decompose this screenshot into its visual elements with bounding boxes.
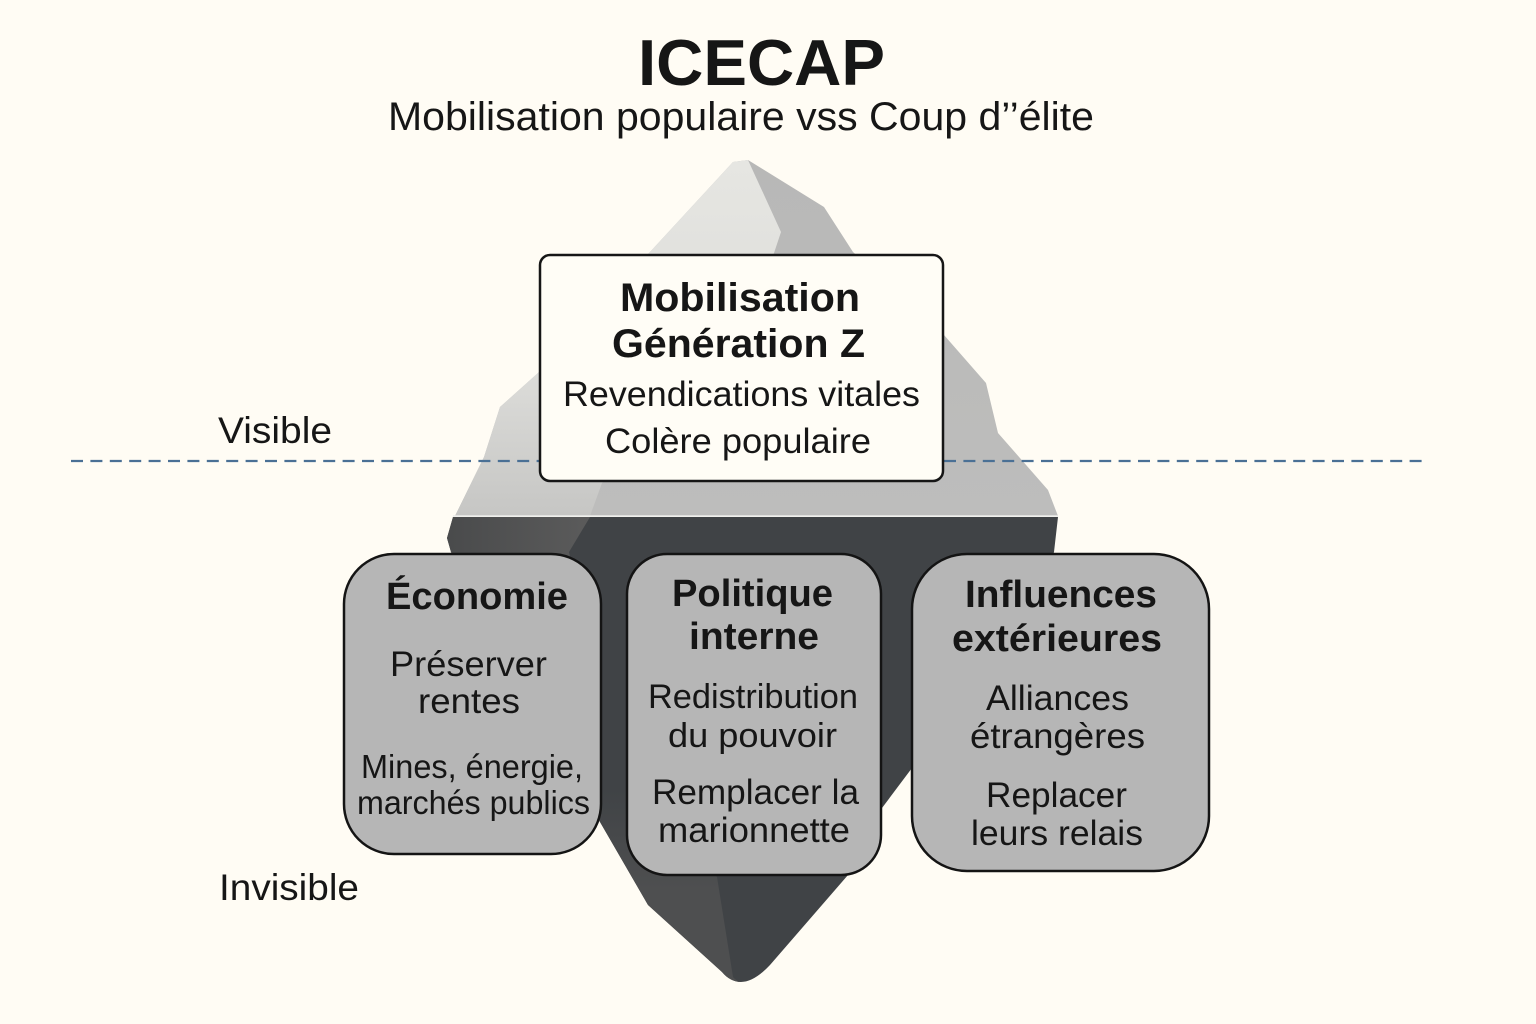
subtitle: Mobilisation populaire vss Coup d’’élite (388, 95, 1094, 139)
text: politique details: Remplacer la (652, 773, 860, 812)
text: influences details: leurs relais (971, 814, 1143, 853)
heading: economie: Économie (386, 574, 568, 618)
text: politique details: Redistribution (648, 678, 858, 716)
text: economie details (357, 645, 590, 821)
iceberg: submerged part (447, 517, 1058, 982)
text: demands: Revendications vitales (563, 375, 920, 414)
title: ICECAP (638, 26, 885, 99)
text: economie details: marchés publics (357, 784, 590, 821)
label: invisible: Invisible (219, 867, 359, 908)
text: politique details (648, 678, 860, 850)
heading: mobilisation: Génération Z (612, 322, 865, 366)
text: economie details: Préserver (390, 645, 547, 684)
heading: politique interne: Politique (672, 573, 833, 615)
heading: mobilisation: Mobilisation (620, 276, 860, 320)
text: politique details: marionnette (658, 811, 850, 850)
panel: influences exterieures (912, 554, 1209, 871)
text: demands: Colère populaire (605, 422, 871, 461)
heading: politique interne: interne (689, 616, 819, 658)
label: visible: Visible (218, 410, 332, 451)
heading: influences exterieures: Influences (965, 574, 1157, 616)
water line (71, 460, 1422, 462)
iceberg (447, 160, 1058, 982)
heading: politique interne (672, 573, 833, 658)
text: influences details: Replacer (986, 776, 1127, 815)
panel: politique interne (627, 554, 881, 875)
heading: influences exterieures: extérieures (952, 618, 1162, 660)
heading: influences exterieures (952, 574, 1162, 660)
text: politique details: du pouvoir (668, 717, 837, 755)
panel: mobilisation (540, 255, 943, 481)
panel: economie (344, 554, 601, 854)
heading: mobilisation (612, 276, 865, 366)
text: demands (563, 375, 920, 461)
text: influences details (970, 679, 1145, 853)
text: economie details: rentes (418, 682, 520, 721)
text: economie details: Mines, énergie, (361, 748, 583, 785)
text: influences details: étrangères (970, 717, 1145, 756)
text: influences details: Alliances (986, 679, 1129, 718)
iceberg: visible part (453, 160, 1058, 516)
